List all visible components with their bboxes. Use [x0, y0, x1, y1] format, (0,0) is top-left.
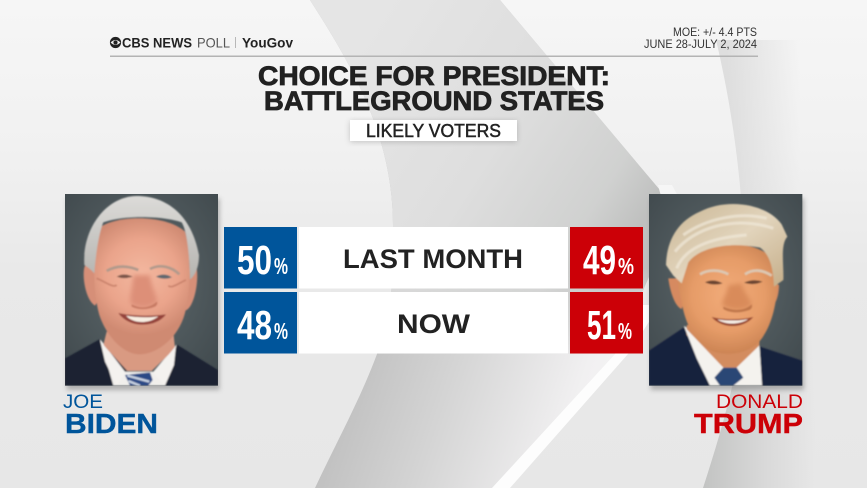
Trump now: %	[618, 318, 632, 344]
name: Donald Trump	[694, 392, 803, 439]
Trump now: 51	[587, 302, 616, 348]
label: now	[299, 292, 568, 354]
name: Donald Trump: DONALD	[716, 392, 803, 413]
subtitle tag: likely voters: LIKELY VOTERS	[366, 121, 501, 141]
Biden now: 48	[237, 302, 272, 348]
row: now	[224, 292, 643, 354]
row: last month	[224, 227, 643, 288]
margin of error and dates: MOE: +/- 4.4 PTS	[673, 25, 757, 39]
header: CBS News Poll / YouGov logo: POLL	[197, 34, 230, 50]
margin of error and dates: JUNE 28-JULY 2, 2024	[644, 37, 757, 51]
header: CBS News Poll / YouGov logo: CBS NEWS	[122, 34, 192, 50]
title: BATTLEGROUND STATES	[264, 86, 604, 116]
margin of error and dates	[644, 25, 757, 51]
label: last month	[299, 227, 568, 288]
title	[258, 61, 610, 116]
label: last month: LAST MONTH	[343, 244, 523, 274]
Biden last month: %	[274, 253, 288, 279]
Trump last month: 49	[583, 237, 616, 283]
name: Joe Biden	[63, 392, 158, 439]
Biden now: %	[274, 318, 288, 344]
header rule	[110, 56, 758, 57]
portrait: Donald Trump	[649, 194, 804, 390]
title: CHOICE FOR PRESIDENT:	[258, 61, 610, 91]
portrait: Joe Biden	[65, 194, 220, 390]
icon: CBS eye	[110, 37, 121, 48]
name: Donald Trump: TRUMP	[694, 408, 803, 439]
name: Joe Biden: BIDEN	[65, 408, 158, 439]
Biden now	[224, 292, 297, 354]
Biden last month	[224, 227, 297, 288]
Trump last month: %	[618, 253, 634, 279]
header: CBS News Poll / YouGov logo: YouGov	[242, 34, 293, 50]
header: CBS News Poll / YouGov logo	[110, 34, 293, 50]
Trump last month	[570, 227, 643, 288]
Biden last month: 50	[237, 237, 272, 283]
Trump now	[570, 292, 643, 354]
name: Joe Biden: JOE	[63, 392, 103, 413]
label: now: NOW	[397, 309, 471, 339]
